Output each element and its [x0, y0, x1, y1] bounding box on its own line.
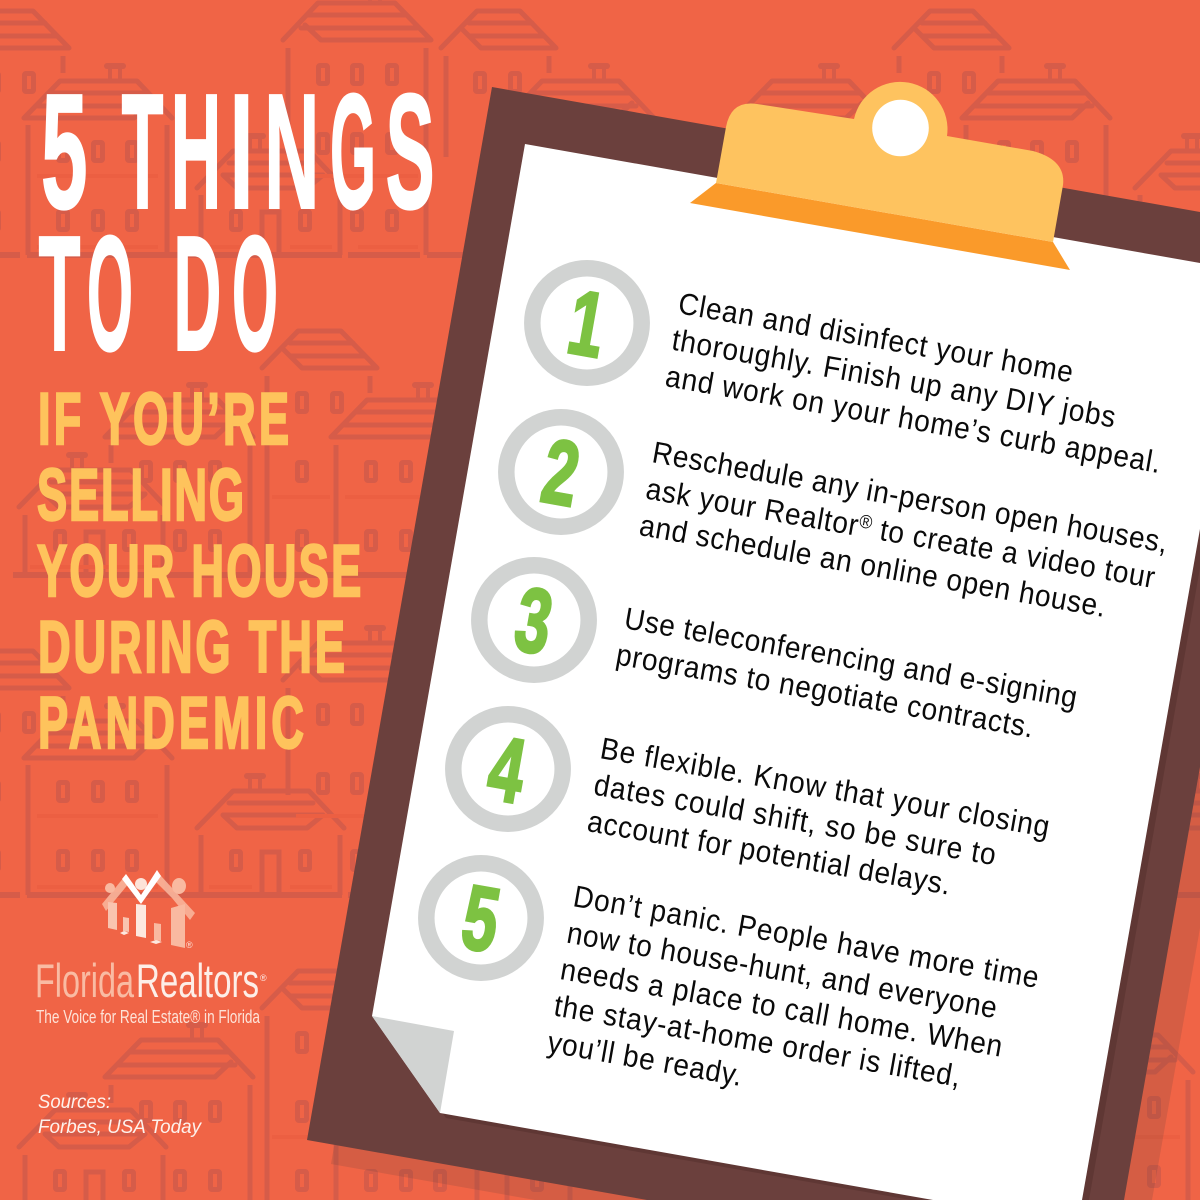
subtitle: YOUR HOUSE: [37, 530, 361, 612]
logo tagline: The Voice for Real Estate® in Florida: [36, 1006, 261, 1027]
title: T: [122, 60, 164, 243]
logo icon: people forming a house: ®: [186, 940, 193, 950]
clip body: [716, 82, 1063, 242]
title: D: [173, 202, 221, 385]
sources: Forbes, USA Today: [38, 1116, 202, 1138]
step 4 text: [585, 731, 1052, 917]
step 3 text: programs to negotiate contracts.: [613, 637, 1036, 745]
step 4 text: Be flexible. Know that your closing: [598, 731, 1052, 844]
subtitle: SELLING: [37, 454, 244, 536]
step 2 text: to create a video tour: [869, 512, 1158, 595]
clip: [690, 82, 1070, 270]
step 1: [532, 268, 1176, 480]
subtitle: DURING THE: [38, 606, 345, 688]
step 5 text: needs a place to call home. When: [558, 952, 1005, 1064]
step 1 text: and work on your home’s curb appeal.: [663, 359, 1164, 480]
number badge 2: 2: [535, 421, 586, 526]
step 2 text: ®: [858, 510, 875, 533]
step 3 text: Use teleconferencing and e-signing: [622, 601, 1080, 715]
clipboard: [307, 82, 1200, 1200]
number badge 3: [479, 565, 589, 675]
logo wordmark: Florida: [35, 954, 135, 1007]
step 3: [479, 565, 1080, 751]
clipboard drop shadow: [331, 111, 1200, 1200]
step 2 text: and schedule an online open house.: [637, 508, 1109, 624]
title: I: [230, 60, 254, 243]
number badge 5: 5: [455, 867, 506, 972]
step 2 text: ask your Realtor: [643, 472, 861, 543]
step 1 text: Clean and disinfect your home: [676, 286, 1076, 390]
step 5 text: the stay-at-home order is lifted,: [551, 989, 963, 1094]
number badge 4: [453, 714, 563, 824]
logo wordmark: Realtors: [136, 954, 259, 1007]
clip hole: [872, 100, 929, 156]
step 1 text: thoroughly. Finish up any DIY jobs: [669, 323, 1118, 435]
sources: [38, 1091, 202, 1138]
step 5 text: [545, 879, 1041, 1141]
title: N: [264, 60, 319, 243]
number badge 3: 3: [508, 569, 559, 674]
number badge 4: 4: [481, 718, 532, 823]
clipboard board: [307, 87, 1200, 1200]
step 5 text: now to house-hunt, and everyone: [564, 916, 1000, 1025]
step 4: [453, 714, 1052, 917]
step 5: [426, 863, 1041, 1141]
title: 5: [41, 60, 88, 243]
step 5 text: you’ll be ready.: [545, 1025, 745, 1093]
step 1 text: [663, 286, 1176, 480]
title: H: [171, 60, 221, 243]
sources: Sources:: [38, 1091, 111, 1113]
step 2: [506, 417, 1170, 633]
title: G: [330, 60, 376, 243]
number badge 1: 1: [561, 272, 612, 377]
step 4 text: account for potential delays.: [585, 804, 953, 902]
subtitle: PANDEMIC: [38, 682, 304, 764]
title: [38, 60, 435, 385]
Florida Realtors logo: [35, 870, 267, 1027]
folded paper corner: [372, 1016, 454, 1113]
title: T: [38, 202, 80, 385]
title: O: [87, 202, 133, 385]
number badge 2: [506, 417, 616, 527]
infographic canvas: S: [386, 60, 435, 243]
paper sheet: [372, 144, 1200, 1200]
subtitle: [37, 378, 361, 764]
number badge 1: [532, 268, 642, 378]
logo wordmark: [35, 954, 267, 1007]
number badge 5: [426, 863, 536, 973]
logo wordmark: ®: [260, 973, 267, 983]
subtitle: IF YOU’RE: [38, 378, 289, 460]
clip lower band: [690, 183, 1070, 270]
step 5 text: Don’t panic. People have more time: [571, 879, 1041, 995]
step 2 text: [637, 435, 1170, 633]
paper shadow: [378, 149, 1200, 1200]
logo icon: people forming a house: [102, 870, 195, 950]
step 2 text: Reschedule any in-person open houses,: [650, 435, 1170, 560]
title: O: [232, 202, 278, 385]
step 4 text: dates could shift, so be sure to: [591, 768, 999, 872]
